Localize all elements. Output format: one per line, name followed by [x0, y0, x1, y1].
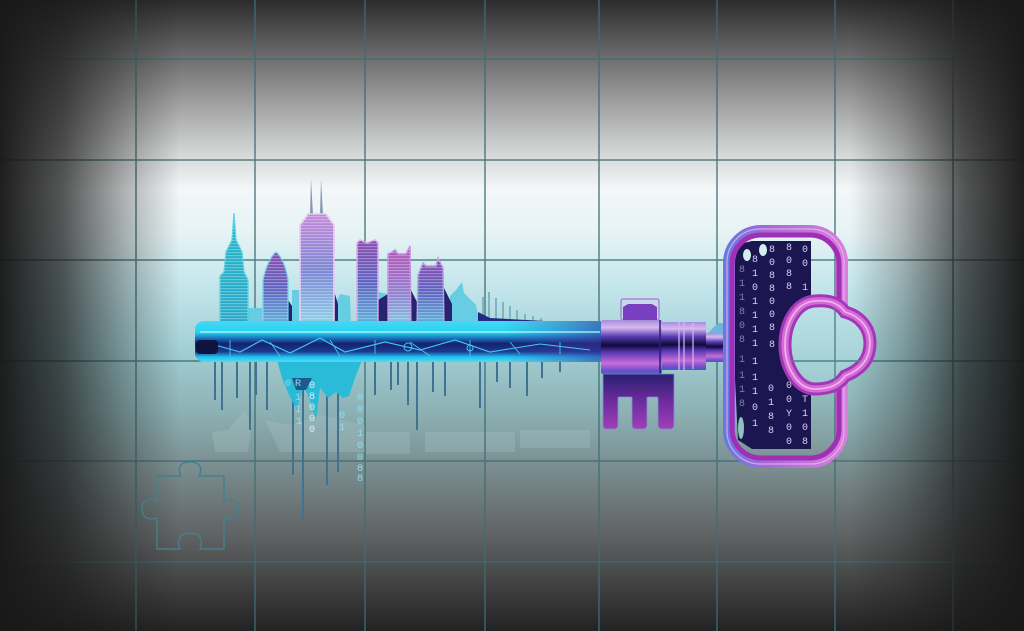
panel code columns: 0: [769, 310, 775, 321]
dripping digits: 1: [357, 428, 363, 440]
building: purple tower one: [357, 240, 378, 325]
panel code columns: 8: [768, 426, 774, 437]
panel code columns: 1: [752, 269, 758, 280]
panel code columns: 8: [768, 412, 774, 423]
dripping digits: 1: [296, 416, 302, 428]
panel code columns: 0: [786, 423, 792, 434]
city skyline: [220, 179, 600, 326]
panel code columns: 0: [786, 381, 792, 392]
panel code columns: 1: [802, 283, 808, 294]
dripping digits: 0: [309, 380, 315, 392]
dripping digits: 0: [357, 404, 363, 416]
panel code columns: T: [802, 395, 808, 406]
panel code columns: 1: [752, 339, 758, 350]
panel code columns: 8: [769, 245, 775, 256]
panel code columns: 0: [752, 403, 758, 414]
dripping digits: 8: [357, 463, 363, 475]
panel code columns: 1: [752, 387, 758, 398]
panel code columns: 8: [752, 255, 758, 266]
bow inner dark frame band: [732, 235, 839, 458]
panel code columns: 8: [786, 269, 792, 280]
panel code columns: 0: [769, 258, 775, 269]
panel code columns: 0: [802, 423, 808, 434]
panel code columns: 8: [769, 323, 775, 334]
icon: puzzle piece outline: [142, 462, 239, 549]
dripping digits: 0: [339, 410, 345, 422]
panel code columns: 1: [739, 385, 745, 396]
panel edge gaps: [730, 244, 767, 439]
panel code columns: 8: [739, 265, 745, 276]
dripping digits: [285, 378, 363, 485]
building: purple tower two: [417, 258, 444, 325]
dripping digits: 0: [309, 413, 315, 425]
panel code columns: 1: [752, 373, 758, 384]
panel code columns: 1: [739, 293, 745, 304]
panel code columns: 0: [739, 321, 745, 332]
panel code columns: 8: [769, 284, 775, 295]
bow frame highlight: [727, 229, 844, 464]
clover ring: [785, 301, 870, 389]
key top tab: [621, 299, 659, 320]
dripping digits: 0: [309, 424, 315, 436]
panel code columns: 8: [802, 437, 808, 448]
dark data panel: [731, 241, 811, 449]
dripping digits: 0: [285, 378, 291, 390]
panel code columns: 1: [752, 357, 758, 368]
drips below shaft: [215, 360, 560, 520]
panel code columns: 0: [768, 384, 774, 395]
panel code columns: 0: [786, 395, 792, 406]
panel code columns: 0: [802, 245, 808, 256]
panel code columns: 8: [786, 282, 792, 293]
panel code columns: [739, 243, 808, 448]
panel code columns: Y: [786, 409, 792, 420]
key collar: [601, 320, 734, 374]
panel code columns: 8: [739, 399, 745, 410]
panel code columns: 1: [752, 419, 758, 430]
panel code columns: 0: [786, 256, 792, 267]
dripping digits: 0: [309, 402, 315, 414]
panel code columns: 1: [752, 325, 758, 336]
panel code columns: 0: [802, 259, 808, 270]
dripping digits: 0: [357, 392, 363, 404]
ring hole grid lines: [791, 306, 864, 384]
panel code columns: 0: [786, 437, 792, 448]
panel code columns: 1: [752, 311, 758, 322]
building: rounded tower: [263, 252, 288, 325]
dripping digits: 0: [357, 416, 363, 428]
panel code columns: 8: [739, 307, 745, 318]
building: magenta tower: [388, 246, 411, 325]
dripping digits: 1: [295, 392, 301, 404]
panel code columns: 1: [739, 371, 745, 382]
building: teal spire tower: [220, 213, 248, 325]
panel code columns: 8: [786, 243, 792, 254]
dripping digits: 8: [357, 473, 363, 485]
panel code columns: 1: [739, 355, 745, 366]
dripping digits: 0: [357, 452, 363, 464]
clover ring highlight: [785, 301, 870, 389]
key shaft: [195, 321, 607, 362]
panel code columns: 1: [802, 409, 808, 420]
dripping digits: 1: [295, 404, 301, 416]
dripping digits: 8: [309, 391, 315, 403]
bow outer frame: [729, 231, 842, 462]
panel code columns: 0: [769, 297, 775, 308]
panel code columns: 8: [769, 271, 775, 282]
panel code columns: 1: [768, 398, 774, 409]
panel code columns: 1: [739, 279, 745, 290]
dripping digits: R: [295, 378, 302, 390]
panel code columns: 1: [752, 297, 758, 308]
dripping digits: 1: [339, 422, 345, 434]
key bit with notches: [603, 374, 674, 429]
clover ring colour band: [785, 301, 870, 389]
panel code columns: 0: [752, 283, 758, 294]
key bow: [727, 229, 870, 464]
panel code columns: 8: [769, 340, 775, 351]
dripping digits: 0: [357, 440, 363, 452]
fading thin spires: [482, 292, 542, 323]
building: tall twin antenna tower: [300, 179, 334, 326]
panel code columns: 8: [739, 335, 745, 346]
